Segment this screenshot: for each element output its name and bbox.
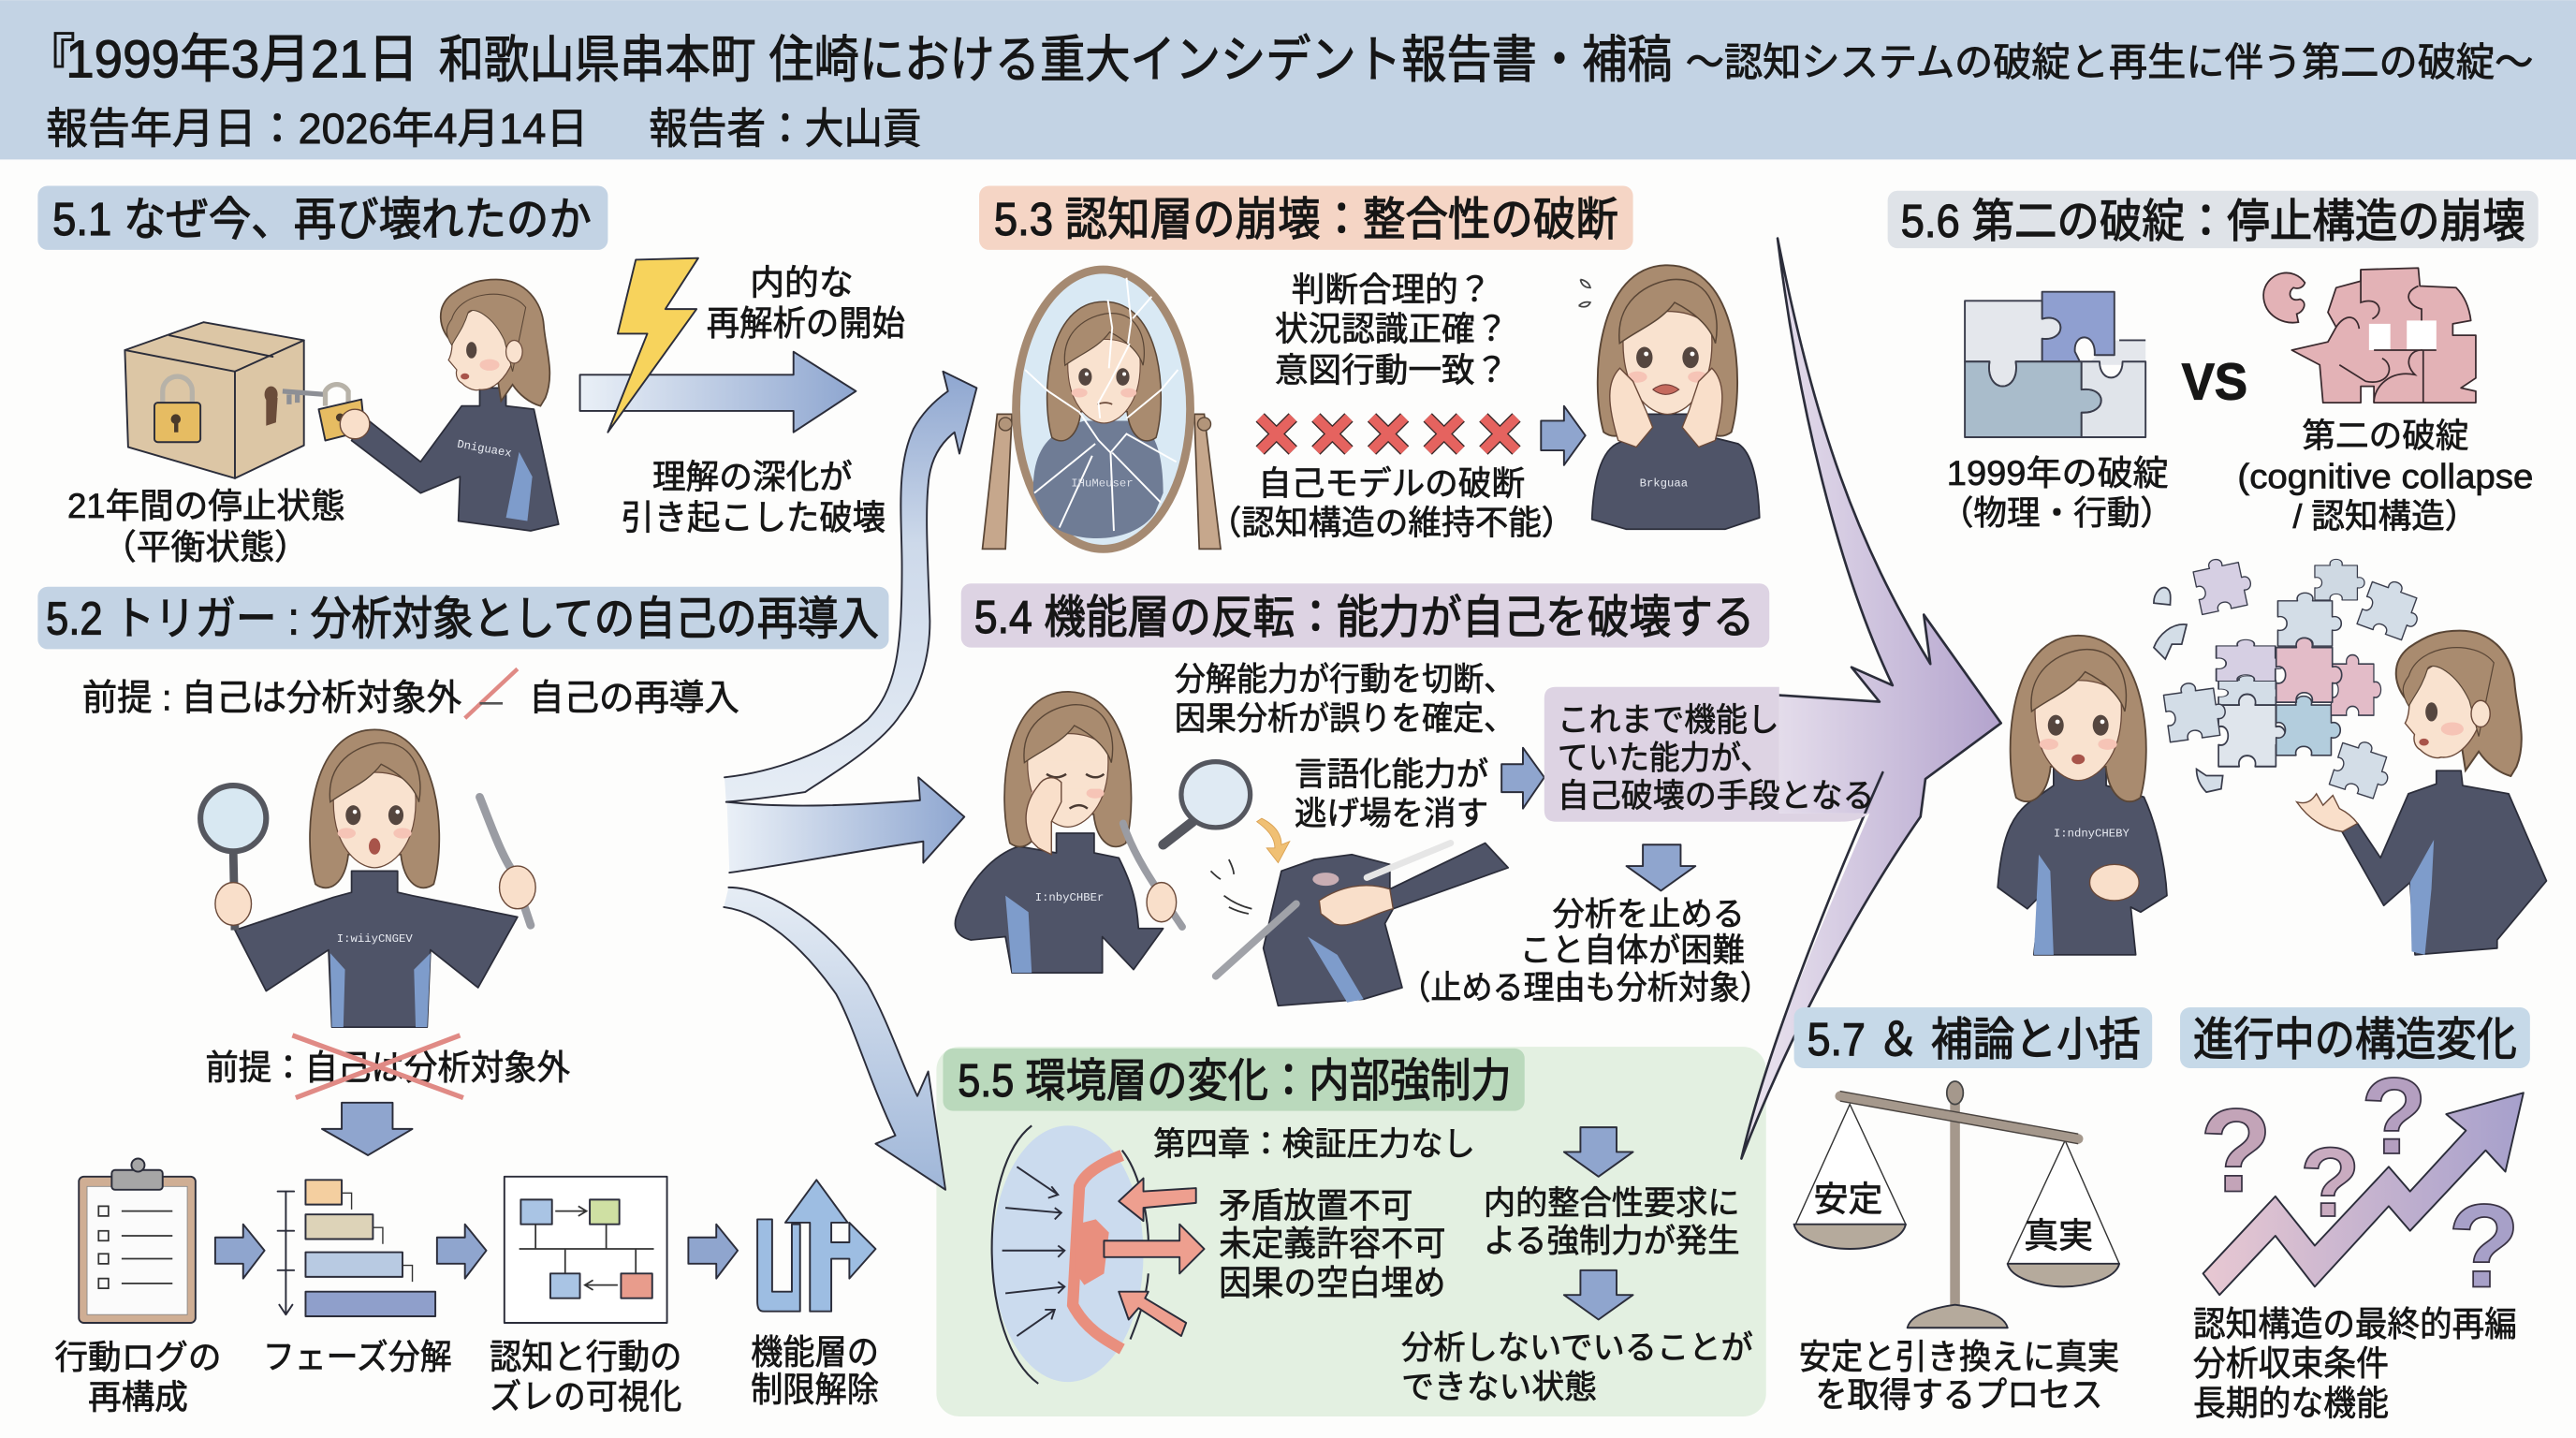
icon: lightning: [607, 258, 698, 433]
icon: scale: 安定: [1814, 1181, 1882, 1219]
text: second failure: / 認知構造）: [2292, 498, 2478, 536]
icon: question marks: [2200, 1055, 2520, 1312]
arrow: [1541, 406, 1586, 465]
icon: scale: 真実: [2024, 1216, 2093, 1255]
text: second failure: 第二の破綻: [2302, 418, 2468, 455]
person with key: Dniguaex: [456, 438, 513, 461]
callout: means of self destruction: [1544, 687, 1875, 822]
panel: ongoing structural change: [2180, 1007, 2530, 1422]
heading 5.1: 5.1 なぜ今、再び壊れたのか: [52, 195, 592, 245]
arrow down: [1564, 1127, 1633, 1177]
arrow: from trigger up to 5.3: [724, 372, 976, 802]
icon: question marks: ?: [2200, 1085, 2272, 1217]
title: 1999年3月21日: [66, 30, 419, 89]
label: hard to stop: （止める理由も分析対象）: [1399, 970, 1771, 1006]
texts: 未定義許容不可: [1219, 1225, 1445, 1263]
labels: 再構成: [88, 1378, 188, 1416]
text: cannot not analyze: できない状態: [1401, 1370, 1597, 1406]
label: destruction: 引き起こした破壊: [621, 498, 886, 536]
arrow: from trigger down to 5.5: [724, 888, 945, 1190]
label: self model: （認知構造の維持不能）: [1208, 505, 1574, 542]
text: 1999 failure: 1999年の破綻: [1947, 454, 2169, 492]
label: internal reanalysis: 再解析の開始: [707, 304, 905, 343]
arrow: from trigger to 5.4: [727, 777, 964, 873]
arrow down: [322, 1103, 413, 1155]
text: remaining: 認知構造の最終的再編: [2193, 1305, 2517, 1343]
texts: 言語化能力が: [1295, 756, 1488, 793]
questions: [1275, 271, 1508, 389]
icon: clipboard: [79, 1158, 196, 1323]
subtitle: 〜認知システムの破綻と再生に伴う第二の破綻〜: [1686, 40, 2533, 84]
person back view: [2297, 631, 2546, 955]
arrow: [1501, 748, 1544, 809]
icon: intact puzzle: [1965, 292, 2145, 437]
arrow down: [1564, 1270, 1633, 1319]
label: internal reanalysis: [707, 263, 905, 343]
panel: 5.1: [37, 185, 905, 566]
label: self model: 自己モデルの破断: [1258, 464, 1525, 502]
icon: question marks: ?: [2300, 1128, 2360, 1238]
icon: locked box: [124, 322, 365, 478]
panel: 5.3: [979, 185, 1760, 549]
text: cannot not analyze: 分析しないでいることが: [1401, 1330, 1753, 1367]
text: 1999 failure: （物理・行動）: [1940, 494, 2174, 532]
label: stopped state: [67, 487, 345, 566]
diagram: internal force: [992, 1125, 1204, 1384]
icon: scale: [1794, 1081, 2119, 1328]
title: 『: [23, 30, 76, 89]
text: second failure: [2237, 418, 2533, 536]
person worried: [1579, 265, 1760, 529]
icon: five red crosses: [1260, 418, 1516, 450]
title: 和歌山県串本町: [439, 32, 755, 89]
labels: 行動ログの: [54, 1339, 221, 1376]
texts: 因果分析が誤りを確定、: [1175, 700, 1515, 737]
texts: 逃げ場を消す: [1295, 796, 1488, 832]
person with key: [340, 280, 559, 531]
texts: [1153, 1126, 1475, 1302]
label: self model: [1208, 464, 1574, 542]
heading 5.4: 5.4 機能層の反転：能力が自己を破壊する: [974, 593, 1754, 643]
text: remaining: 分析収束条件: [2193, 1344, 2389, 1383]
text: stability for truth: 安定と引き換えに真実: [1799, 1338, 2119, 1376]
report date: 報告年月日：2026年4月14日: [46, 105, 588, 153]
person crying with scalpel: [955, 692, 1182, 973]
text: stability for truth: [1799, 1338, 2119, 1415]
callout: means of self destruction: これまで機能し: [1558, 702, 1779, 739]
texts: [1175, 661, 1515, 832]
text: stability for truth: を取得するプロセス: [1815, 1376, 2103, 1415]
panel: 5.6: [1888, 191, 2546, 955]
label: destruction: 理解の深化が: [652, 458, 853, 495]
label: hard to stop: [1399, 896, 1771, 1006]
icon: question marks: ?: [2361, 1055, 2427, 1177]
arrow: convergence into 5.6: [1741, 239, 2001, 1158]
label: stopped state: （平衡状態）: [102, 528, 309, 566]
panel 5.5 background: [936, 1047, 1766, 1416]
panel: 5.4: [955, 583, 1875, 1006]
labels: ズレの可視化: [490, 1377, 681, 1416]
struck premise: 前提：自己は分析対象外: [205, 1049, 570, 1087]
labels: [54, 1333, 879, 1416]
icon: question marks: ?: [2448, 1180, 2520, 1312]
arrow: [688, 1225, 738, 1279]
label: hard to stop: こと自体が困難: [1519, 932, 1745, 969]
text: remaining: 長期的な機能: [2193, 1384, 2389, 1422]
texts: 分解能力が行動を切断、: [1175, 661, 1515, 697]
icon: torn suit: [1211, 844, 1508, 1005]
texts: 矛盾放置不可: [1219, 1187, 1412, 1225]
arrow down: [1627, 844, 1695, 890]
struck premise: [205, 1035, 570, 1098]
label: stopped state: 21年間の停止状態: [67, 487, 345, 525]
person front: I:ndnyCHEBY: [2054, 827, 2130, 840]
heading 5.6: 5.6 第二の破綻：停止構造の崩壊: [1901, 197, 2525, 247]
labels: 制限解除: [751, 1371, 879, 1409]
title: [23, 30, 1673, 89]
person worried: Brkguaa: [1640, 477, 1688, 491]
label: internal reanalysis: 内的な: [750, 263, 854, 301]
questions: 判断合理的？: [1292, 271, 1491, 308]
heading 5.5: 5.5 環境層の変化：内部強制力: [958, 1056, 1512, 1107]
arrow: [437, 1225, 487, 1279]
labels: 認知と行動の: [490, 1338, 681, 1376]
text: cannot not analyze: [1401, 1330, 1753, 1406]
panel: 5.7: [1794, 1007, 2152, 1415]
labels: 機能層の: [751, 1333, 879, 1372]
heading ongoing: 進行中の構造変化: [2193, 1015, 2517, 1065]
person with magnifier and scalpel: [200, 729, 535, 1027]
panel: 5.5: [943, 1049, 1753, 1406]
arrow: [215, 1225, 265, 1279]
premise text: [82, 668, 739, 718]
heading 5.3: 5.3 認知層の崩壊：整合性の破断: [994, 195, 1618, 245]
text: forcing generated: よる強制力が発生: [1484, 1224, 1740, 1260]
icon: phase bars: [278, 1180, 435, 1316]
heading 5.7: 5.7 ＆ 補論と小括: [1808, 1015, 2141, 1065]
text: forcing generated: [1484, 1185, 1740, 1260]
premise text: 自己の再導入: [529, 678, 739, 718]
questions: 状況認識正確？: [1275, 310, 1508, 347]
reporter: 報告者：大山貢: [649, 105, 922, 153]
texts: 因果の空白埋め: [1219, 1264, 1445, 1302]
icon: cracked mirror: IHuMeuser: [1071, 477, 1134, 491]
text: forcing generated: 内的整合性要求に: [1484, 1185, 1740, 1222]
icon: rising arrow: [2203, 1093, 2524, 1295]
icon: scattered puzzle: [2154, 553, 2427, 800]
icon: cracked mirror: [983, 270, 1221, 549]
icon: block arrow: [580, 352, 856, 433]
label: hard to stop: 分析を止める: [1553, 896, 1745, 932]
icon: branching arrow: [757, 1180, 875, 1312]
callout: means of self destruction: 自己破壊の手段となる: [1558, 778, 1875, 814]
texts: 第四章：検証圧力なし: [1153, 1126, 1475, 1163]
text: 1999 failure: [1940, 454, 2174, 532]
heading 5.2: 5.2 トリガー : 分析対象としての自己の再導入: [46, 594, 879, 645]
panel: 5.2: [37, 587, 889, 1416]
person crying with scalpel: I:nbyCHBEr: [1035, 891, 1104, 904]
person front: [1998, 636, 2167, 955]
icon: flow diagram: [505, 1177, 667, 1323]
premise text: 前提 : 自己は分析対象外: [82, 678, 462, 718]
header band: [0, 0, 2576, 159]
labels: フェーズ分解: [263, 1338, 452, 1376]
icon: small orange arrow: [1257, 818, 1290, 863]
icon: collapsed puzzle: [2263, 268, 2476, 403]
callout: means of self destruction: ていた能力が、: [1558, 741, 1771, 777]
label: destruction: [621, 458, 886, 536]
person with magnifier and scalpel: I:wiiyCNGEV: [337, 932, 413, 946]
questions: 意図行動一致？: [1275, 351, 1508, 389]
vs: VS: [2182, 354, 2247, 411]
text: remaining: [2193, 1305, 2517, 1422]
text: second failure: (cognitive collapse: [2237, 457, 2533, 495]
icon: magnifier: [1164, 762, 1251, 844]
title: 住崎における重大インシデント報告書・補稿: [768, 32, 1673, 89]
